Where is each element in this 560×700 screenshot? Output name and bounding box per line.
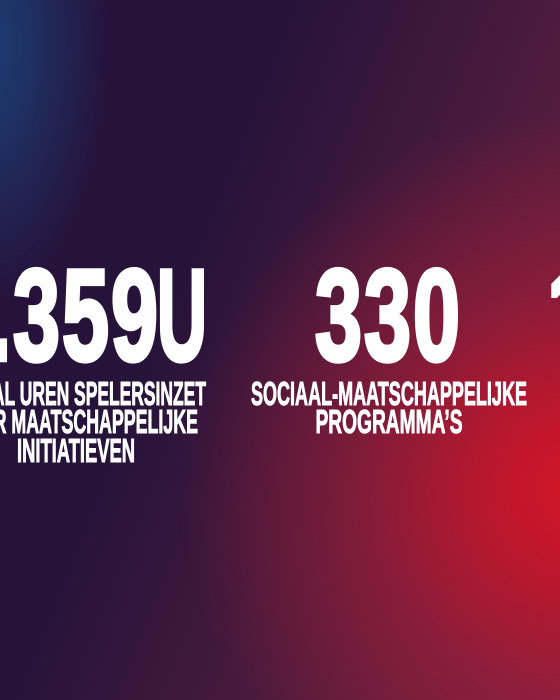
number: 330	[315, 242, 460, 388]
statistic: social programmes	[251, 242, 527, 440]
number: 1.359U	[0, 242, 207, 388]
number: 330: 0	[413, 242, 460, 388]
statistic: hours of player commitment	[0, 242, 207, 469]
label: social programmes	[251, 375, 527, 440]
label: hours of player commitment	[0, 375, 206, 469]
number: 1.359U: 5	[62, 242, 109, 388]
number: 1.359U: 3	[13, 242, 60, 388]
label: hours of player commitment: INITIATIEVEN	[17, 432, 135, 469]
number: 1.359U: 9	[111, 242, 158, 388]
number: 330: 3	[364, 242, 411, 388]
statistics graphic	[0, 266, 560, 462]
number: 330: 3	[315, 242, 362, 388]
number: 1.359U: U	[157, 242, 207, 388]
